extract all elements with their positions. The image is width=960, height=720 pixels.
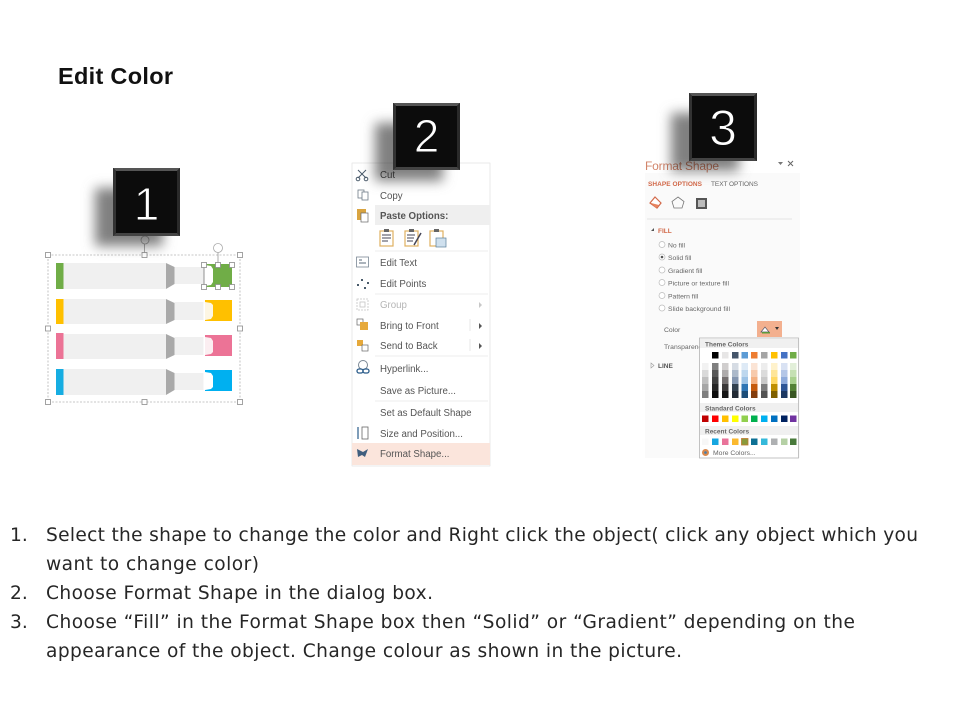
more colors: More Colors... bbox=[713, 450, 756, 457]
icon: scissors bbox=[356, 170, 368, 181]
icon: size and position bbox=[358, 427, 368, 439]
fill options: Picture or texture fill bbox=[668, 280, 729, 288]
step 1 text: 1. bbox=[10, 525, 28, 546]
row: green bbox=[56, 263, 232, 289]
fill options: Pattern fill bbox=[668, 294, 699, 300]
step 1 text: Select the shape to change the color and Right click the object( click any object which you bbox=[46, 525, 918, 546]
number badge 2: 2 bbox=[414, 110, 439, 162]
fill options: No fill bbox=[668, 242, 685, 250]
fill options: Gradient fill bbox=[668, 268, 703, 275]
selection frame bbox=[48, 255, 240, 402]
panel: step 3 format shape pane bbox=[645, 159, 800, 458]
menu labels: Bring to Front bbox=[380, 321, 439, 332]
fill section bbox=[651, 228, 672, 235]
step 2 text: 2. bbox=[10, 583, 28, 604]
menu labels: Hyperlink... bbox=[380, 364, 428, 375]
theme swatches bbox=[702, 352, 796, 358]
icon: pentagon bbox=[672, 197, 684, 208]
menu labels: Edit Text bbox=[380, 258, 417, 269]
step 3 text: Choose “Fill” in the Format Shape box then “Solid” or “Gradient” depending on the bbox=[46, 612, 855, 633]
step 1 text: want to change color) bbox=[46, 554, 259, 575]
panel: step 2 context menu bbox=[352, 163, 490, 466]
pane tabs bbox=[648, 181, 759, 188]
fill section: FILL bbox=[658, 228, 672, 235]
number badge 1 bbox=[95, 168, 180, 246]
color row: Color bbox=[664, 327, 681, 334]
row: pink bbox=[56, 333, 232, 359]
submenu arrows bbox=[470, 302, 482, 351]
selection handles bbox=[46, 236, 242, 404]
number badge 2 bbox=[375, 103, 460, 181]
title: Edit Color bbox=[58, 63, 173, 89]
menu labels: Save as Picture... bbox=[380, 386, 456, 397]
menu labels: Set as Default Shape bbox=[380, 408, 472, 419]
icon: fill bucket bbox=[650, 197, 661, 208]
menu labels: Paste Options: bbox=[380, 211, 448, 222]
icon: edit points bbox=[357, 279, 369, 289]
instructions text bbox=[10, 525, 918, 662]
menu labels: Size and Position... bbox=[380, 429, 463, 440]
menu labels: Edit Points bbox=[380, 279, 426, 290]
menu labels: Format Shape... bbox=[380, 449, 449, 460]
fill options: Slide background fill bbox=[668, 306, 730, 313]
line section bbox=[651, 363, 673, 370]
step 1 text bbox=[10, 525, 918, 575]
color picker popup bbox=[700, 338, 798, 458]
menu labels: Cut bbox=[380, 170, 395, 181]
icon: edit text bbox=[356, 257, 368, 267]
panel: step 1 shape selection bbox=[46, 236, 242, 404]
icon: size grid bbox=[696, 198, 707, 209]
line section: LINE bbox=[658, 363, 673, 370]
recent swatches bbox=[702, 438, 796, 445]
row: yellow bbox=[56, 299, 232, 324]
standard colors label: Standard Colors bbox=[705, 406, 756, 412]
theme colors label: Theme Colors bbox=[705, 342, 749, 348]
icon: hyperlink bbox=[357, 360, 369, 373]
menu dividers bbox=[375, 251, 488, 401]
step 3 text bbox=[10, 612, 855, 662]
standard swatches bbox=[702, 416, 796, 422]
menu labels: Group bbox=[380, 300, 407, 311]
number badge 1: 1 bbox=[134, 178, 159, 230]
icons: paste options bbox=[380, 229, 446, 247]
menu labels bbox=[380, 170, 472, 460]
icon: send to back bbox=[357, 340, 368, 351]
icon: format shape bbox=[357, 449, 368, 457]
color row bbox=[664, 321, 782, 351]
icon: bring to front bbox=[357, 319, 368, 330]
recent colors label: Recent Colors bbox=[705, 428, 749, 436]
pane controls bbox=[778, 161, 793, 166]
menu labels: Copy bbox=[380, 191, 403, 202]
row: blue bbox=[56, 369, 232, 395]
icon: paste bbox=[357, 209, 368, 222]
step 3 text: 3. bbox=[10, 612, 28, 633]
icon: group bbox=[357, 299, 368, 310]
pane title: Format Shape bbox=[645, 159, 719, 173]
menu labels: Send to Back bbox=[380, 341, 438, 352]
icon: copy bbox=[358, 190, 368, 200]
step 3 text: appearance of the object. Change colour as shown in the picture. bbox=[46, 641, 682, 662]
fill options bbox=[659, 242, 730, 313]
number badge 3 bbox=[671, 93, 757, 171]
step 2 text: Choose Format Shape in the dialog box. bbox=[46, 583, 433, 604]
color row: Transparency bbox=[664, 344, 706, 351]
fill options: Solid fill bbox=[668, 255, 692, 262]
pane tabs: SHAPE OPTIONS bbox=[648, 181, 703, 188]
theme shade ramps bbox=[702, 363, 796, 398]
number badge 3: 3 bbox=[709, 100, 737, 156]
pane tabs: TEXT OPTIONS bbox=[711, 181, 759, 188]
